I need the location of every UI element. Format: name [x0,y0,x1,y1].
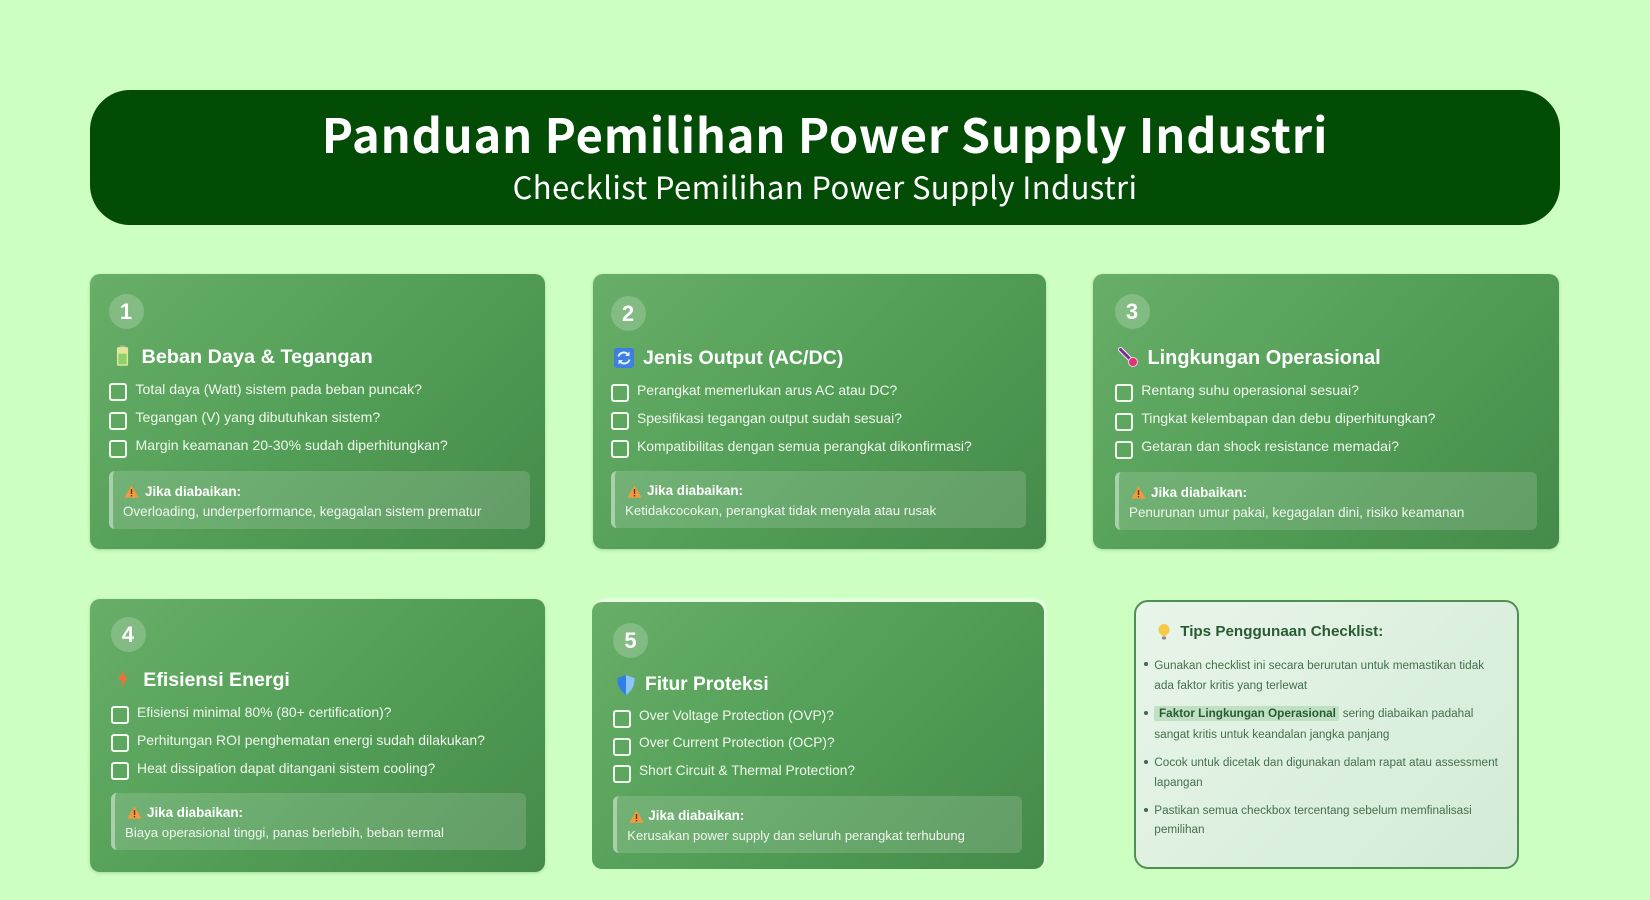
item 2: Perhitungan ROI penghematan energi sudah dilakukan? [137,732,485,748]
item 3: Heat dissipation dapat ditangani sistem cooling? [137,760,435,776]
bullet 2 [1144,711,1148,715]
bullet 1 [1144,662,1148,666]
item 3: Short Circuit & Thermal Protection? [639,763,855,778]
checkbox 1 [111,706,129,724]
panel: card 5 fitur proteksi [592,602,1044,869]
callout text: Kerusakan power supply dan seluruh perangkat terhubung [627,828,965,843]
tips heading: Tips Penggunaan Checklist: [1180,623,1383,640]
title: Panduan Pemilihan Power Supply Industri [322,98,1328,167]
callout title: Jika diabaikan: [147,805,243,820]
subtitle: Checklist Pemilihan Power Supply Industri [513,163,1137,208]
tip 4 line 1: Pastikan semua checkbox tercentang sebelum memfinalisasi [1154,804,1472,817]
icon: warning [124,486,139,498]
callout: consequence [613,796,1022,853]
callout: consequence [109,471,530,529]
callout text: Overloading, underperformance, kegagalan sistem prematur [123,504,481,519]
callout: consequence [111,793,526,850]
number badge 1 [108,294,144,328]
panel: tips [1134,600,1519,869]
icon: warning [627,486,642,498]
heading: Jenis Output (AC/DC) [643,347,843,369]
number badge 3 [1114,294,1150,329]
tip 3 line 2: lapangan [1154,776,1203,789]
item 1: Perangkat memerlukan arus AC atau DC? [637,382,897,398]
item 3: Margin keamanan 20-30% sudah diperhitungkan? [136,437,448,453]
item 1: Rentang suhu operasional sesuai? [1141,382,1359,398]
checkbox 2 [613,738,631,756]
icon: lightning [118,670,128,688]
callout title: Jika diabaikan: [145,484,241,499]
callout title: Jika diabaikan: [647,483,743,498]
item 1: Efisiensi minimal 80% (80+ certification)? [137,704,391,720]
checkbox 3 [613,765,631,783]
number badge 2: 2 [622,300,634,326]
callout: consequence [611,471,1026,528]
item 2: Over Current Protection (OCP)? [639,735,835,750]
checkbox 2 [109,412,127,430]
tip 2 bold: Faktor Lingkungan Operasional [1159,707,1336,720]
highlight [1154,706,1339,721]
icon: warning [1131,486,1146,499]
checkbox 2 [611,412,629,430]
checkbox 3 [111,762,129,780]
heading: Fitur Proteksi [645,674,769,695]
icon: light bulb [1158,624,1170,640]
callout: consequence [1115,472,1537,530]
item 3: Kompatibilitas dengan semua perangkat dikonfirmasi? [637,438,972,454]
item 1: Over Voltage Protection (OVP)? [639,708,834,723]
number badge 1: 1 [120,298,132,324]
callout title: Jika diabaikan: [648,808,744,823]
callout title: Jika diabaikan: [1151,484,1247,500]
number badge 3: 3 [1126,299,1138,324]
checkbox 3 [1114,441,1132,459]
icon: warning [629,810,644,823]
panel: card 4 efisiensi [90,599,545,872]
tip 1 line 2: ada faktor kritis yang terlewat [1154,678,1307,692]
item 2: Tingkat kelembapan dan debu diperhitungkan? [1141,410,1435,426]
number badge 4: 4 [122,622,134,647]
panel: card 1 beban daya [90,274,545,549]
checkbox 1 [1114,384,1132,402]
tip 2 line 2: sangat kritis untuk keandalan jangka panjang [1154,728,1389,740]
panel: card 2 jenis output [593,274,1046,549]
number badge 5 [613,623,648,658]
bullet 3 [1144,760,1148,764]
tip 2 line 1: sering diabaikan padahal [1343,707,1473,720]
tip 3 line 1: Cocok untuk dicetak dan digunakan dalam rapat atau assessment [1154,756,1498,769]
panel: card 3 lingkungan [1093,274,1559,549]
heading: Efisiensi Energi [143,669,290,691]
item 2: Tegangan (V) yang dibutuhkan sistem? [136,409,380,425]
callout text: Ketidakcocokan, perangkat tidak menyala atau rusak [625,503,936,518]
heading: Lingkungan Operasional [1148,347,1381,369]
icon: thermometer [1118,347,1138,367]
tip 1 line 1: Gunakan checklist ini secara berurutan untuk memastikan tidak [1154,658,1484,672]
number badge 4 [110,617,146,652]
heading: Beban Daya & Tegangan [142,346,373,368]
checkbox 1 [109,383,127,401]
number badge 5: 5 [624,628,637,653]
item 2: Spesifikasi tegangan output sudah sesuai? [637,410,902,426]
icon: warning [127,806,142,819]
icon: battery [116,345,128,366]
icon: refresh [614,348,634,368]
item 1: Total daya (Watt) sistem pada beban puncak? [136,380,422,396]
callout text: Penurunan umur pakai, kegagalan dini, risiko keamanan [1129,505,1464,520]
tip 4 line 2: pemilihan [1154,823,1205,836]
item 3: Getaran dan shock resistance memadai? [1141,438,1399,454]
checkbox 1 [613,710,631,728]
bullet 4 [1144,808,1148,812]
callout text: Biaya operasional tinggi, panas berlebih, beban termal [125,824,444,840]
checkbox 2 [111,734,129,752]
icon: shield [618,675,635,695]
header banner [90,90,1560,225]
checkbox 3 [611,440,629,458]
checkbox 2 [1114,412,1132,430]
checkbox 3 [109,440,127,458]
checkbox 1 [611,384,629,402]
number badge 2 [610,296,646,330]
